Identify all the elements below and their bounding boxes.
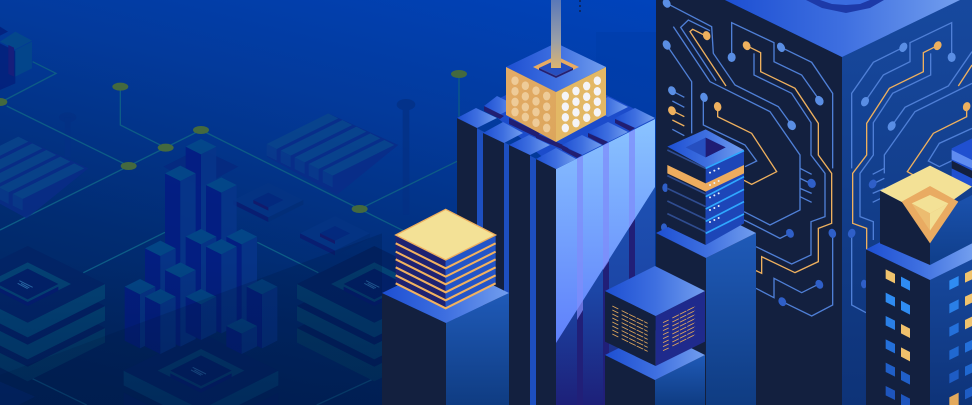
chip right (297, 246, 452, 381)
background antennas (59, 99, 415, 215)
chip lower left (0, 382, 35, 405)
bottom fade (0, 260, 382, 405)
data cube (605, 266, 705, 366)
orange traces (672, 29, 972, 273)
chip bottom (124, 333, 278, 405)
right face (556, 119, 655, 405)
main tower (457, 70, 655, 405)
circuits (661, 0, 972, 316)
cube top (506, 43, 606, 92)
right face (842, 0, 972, 405)
roof tiles ridge (562, 108, 655, 158)
blue traces (667, 3, 972, 316)
cube left face (506, 67, 556, 142)
right face shadow strips (577, 165, 635, 405)
beam strips (577, 129, 635, 320)
status lights (709, 168, 720, 223)
data text rows (612, 306, 695, 351)
diagonal shade (0, 233, 382, 405)
tower roof (866, 217, 972, 280)
roof tiles back (484, 96, 628, 150)
front pedestal (605, 330, 705, 405)
light beam (556, 119, 655, 343)
gem block (880, 166, 972, 265)
column 4 (536, 148, 576, 405)
column 1 (457, 108, 497, 238)
yellow layered stack (396, 209, 496, 308)
column 3 (509, 135, 550, 405)
darker terminals (661, 177, 878, 308)
orange layer lines (396, 243, 496, 308)
server top (667, 129, 744, 168)
orange terminals (666, 30, 972, 117)
server stack (667, 129, 744, 245)
back right small stack (952, 138, 972, 187)
orange band (667, 165, 744, 192)
windows left face (886, 269, 910, 405)
background: circuit-board city (0, 27, 467, 405)
small chips (233, 183, 370, 255)
base fill of tower (457, 118, 655, 405)
server layer lines (667, 150, 706, 232)
roof device (806, 0, 884, 13)
left pedestal (382, 262, 509, 405)
tower right face (930, 259, 972, 405)
blue terminals (661, 0, 956, 132)
circuit traces (0, 62, 459, 405)
big circuit building (656, 0, 972, 405)
column 2 (483, 122, 523, 405)
chip left (0, 246, 105, 381)
tower left face (866, 249, 930, 405)
left face (656, 0, 842, 405)
circuit nodes (0, 70, 467, 213)
dark diamond behind bars (163, 148, 238, 187)
roof (725, 0, 960, 57)
tile block upper left (0, 27, 32, 90)
stripe pack left (0, 137, 88, 218)
roof base (484, 70, 655, 169)
gold cube (506, 0, 606, 142)
light pole (551, 0, 561, 68)
windows right face (949, 270, 972, 405)
stripe pack right (267, 113, 398, 195)
left dots (511, 76, 550, 132)
cube right face (556, 67, 606, 142)
faint far building (596, 32, 656, 122)
yellow top (396, 209, 496, 260)
right dots (562, 76, 601, 132)
bar cluster (125, 139, 277, 354)
server hole (686, 138, 726, 157)
server pedestal (656, 208, 756, 405)
right tower (866, 138, 972, 405)
gem icon (902, 186, 958, 243)
dotted line top (579, 0, 581, 15)
socket (533, 56, 579, 78)
